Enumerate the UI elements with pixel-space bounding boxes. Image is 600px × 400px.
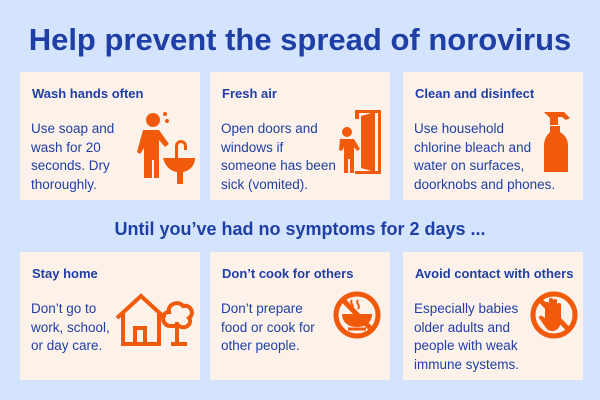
- icon: washing hands: [137, 112, 195, 184]
- text: fresh air: [221, 121, 336, 192]
- text: stay home: or day care.: [31, 338, 102, 353]
- icon: no hand: [530, 292, 578, 338]
- text: clean: water on surfaces,: [414, 158, 524, 173]
- text: wash: seconds. Dry: [31, 158, 110, 173]
- text: fresh air: someone has been: [221, 158, 336, 173]
- panel: wash hands: Wash hands often: [32, 86, 143, 101]
- text: don't cook: other people.: [221, 338, 300, 353]
- text: clean: Use household: [414, 121, 504, 136]
- text: clean: doorknobs and phones.: [414, 176, 555, 192]
- panel: stay home: Stay home: [32, 266, 98, 281]
- text: fresh air: sick (vomited).: [221, 176, 308, 192]
- panel: don't cook: [210, 252, 390, 380]
- title: Help prevent the spread of norovirus: [29, 22, 571, 57]
- text: stay home: [31, 301, 110, 353]
- panel: don't cook: Don’t cook for others: [222, 266, 353, 281]
- panel: fresh air: Fresh air: [222, 86, 277, 101]
- text: wash: [31, 121, 114, 192]
- text: stay home: work, school,: [31, 320, 110, 334]
- icon: house and tree: [116, 293, 194, 346]
- text: avoid contact: older adults and: [414, 320, 510, 334]
- icon: spray bottle: [544, 112, 570, 172]
- text: fresh air: Open doors and: [221, 121, 318, 136]
- panel: stay home: [20, 252, 200, 380]
- panel: avoid contact: [403, 252, 583, 380]
- panel: wash hands: [20, 72, 200, 200]
- text: clean: [414, 121, 555, 192]
- text: don't cook: Don’t prepare: [221, 301, 303, 316]
- icon: door: [339, 110, 381, 174]
- text: avoid contact: Especially babies: [414, 301, 518, 316]
- text: avoid contact: [414, 301, 519, 372]
- text: avoid contact: people with weak: [414, 338, 518, 353]
- text: wash: wash for 20: [31, 140, 101, 154]
- panel: fresh air: [210, 72, 390, 200]
- text: clean: chlorine bleach and: [414, 140, 531, 154]
- text: don't cook: [221, 301, 315, 353]
- text: avoid contact: immune systems.: [414, 356, 519, 372]
- subheading: Until you’ve had no symptoms for 2 days ...: [114, 219, 486, 239]
- text: wash: Use soap and: [31, 121, 114, 136]
- panel: avoid contact: Avoid contact with others: [415, 266, 573, 281]
- panel: clean: Clean and disinfect: [415, 86, 534, 101]
- text: don't cook: food or cook for: [221, 320, 315, 334]
- text: fresh air: windows if: [221, 140, 283, 154]
- text: wash: thoroughly.: [31, 176, 97, 192]
- icon: no cooking: [334, 292, 380, 338]
- panel: clean: [403, 72, 583, 200]
- text: stay home: Don’t go to: [31, 301, 96, 316]
